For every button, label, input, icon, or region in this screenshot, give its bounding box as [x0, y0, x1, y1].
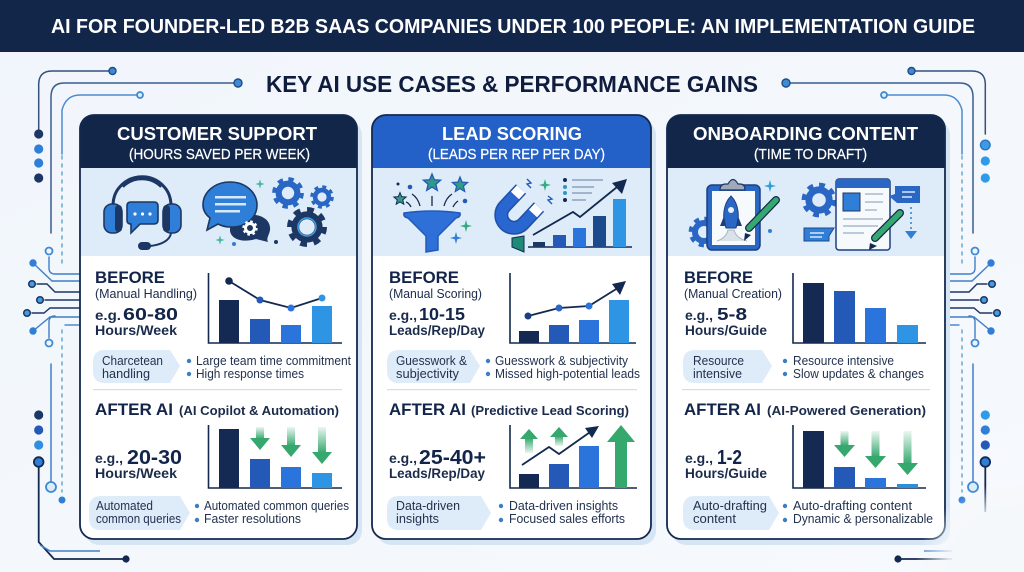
chart: before lead scoring [510, 273, 636, 343]
header: lead scoring [372, 115, 651, 168]
text: before lead scoring: 10-15 [419, 304, 465, 324]
title banner: AI FOR FOUNDER-LED B2B SAAS COMPANIES UNDER 100 PEOPLE: AN IMPLEMENTATION GUIDE [51, 16, 975, 38]
text: after onboarding: Hours/Guide [685, 465, 767, 481]
text: after lead scoring: e.g., [389, 450, 417, 466]
callout: after lead scoring: insights [396, 512, 439, 526]
icon: chat bubbles and gears [203, 179, 332, 246]
header: onboarding content [667, 115, 945, 168]
chart: after customer support [208, 425, 342, 488]
callout: after lead scoring: Data-driven insights [509, 499, 618, 513]
callout: after lead scoring [387, 496, 625, 530]
circuit decoration left [24, 68, 242, 563]
header: onboarding content: ONBOARDING CONTENT [693, 123, 919, 144]
callout: after onboarding: Auto-drafting [693, 499, 767, 513]
callout: before customer support: Large team time commitment [196, 354, 352, 368]
text: before lead scoring [389, 268, 485, 338]
callout: before customer support: High response times [196, 367, 304, 381]
header: customer support [80, 115, 357, 168]
callout: after customer support: common queries [96, 512, 181, 526]
callout: before onboarding: Slow updates & changes [793, 367, 924, 381]
chart: before customer support [208, 273, 342, 343]
text: before customer support: e.g. [95, 308, 121, 323]
callout: after customer support [89, 496, 349, 530]
text: after customer support [95, 400, 339, 481]
text: before lead scoring: (Manual Scoring) [389, 287, 482, 301]
callout: before lead scoring: Guesswork & [396, 354, 468, 368]
text: after lead scoring: (Predictive Lead Scoring) [471, 403, 629, 418]
callout: before lead scoring: Missed high-potential leads [495, 367, 640, 381]
text: before customer support: (Manual Handling) [95, 287, 197, 301]
text: before lead scoring: BEFORE [389, 268, 459, 287]
callout: after onboarding [683, 496, 933, 530]
text: after lead scoring [389, 400, 629, 481]
header: customer support: CUSTOMER SUPPORT [117, 123, 318, 144]
text: after onboarding: 1-2 [717, 447, 742, 469]
text: before customer support [95, 268, 197, 338]
text: after customer support: AFTER AI [95, 400, 173, 419]
callout: after onboarding: Dynamic & personalizable [793, 512, 933, 526]
header: customer support: (HOURS SAVED PER WEEK) [129, 146, 310, 163]
text: after lead scoring: AFTER AI [389, 400, 466, 419]
text: after onboarding: (AI-Powered Generation) [767, 403, 926, 418]
text: before onboarding: BEFORE [684, 268, 753, 287]
text: after onboarding: AFTER AI [684, 400, 761, 419]
text: before onboarding [684, 268, 782, 338]
text: before onboarding: e.g., [685, 308, 713, 323]
icon: magnet and growth chart [501, 178, 632, 252]
callout: after lead scoring: Focused sales efforts [509, 512, 625, 526]
panel: onboarding content [667, 115, 950, 545]
callout: after customer support: Automated common queries [204, 499, 349, 513]
callout: before lead scoring: Guesswork & subjectivity [495, 354, 629, 368]
text: before customer support: BEFORE [95, 268, 165, 287]
text: after lead scoring: 25-40+ [419, 447, 486, 469]
chart: after lead scoring [510, 425, 637, 488]
panel: lead scoring [372, 115, 656, 545]
text: after onboarding [684, 400, 926, 481]
text: after customer support: (AI Copilot & Automation) [179, 403, 339, 418]
callout: before onboarding: intensive [693, 367, 742, 381]
text: before onboarding: (Manual Creation) [684, 287, 782, 301]
section heading: KEY AI USE CASES & PERFORMANCE GAINS [266, 71, 758, 97]
icon: document with gear and pencil [804, 179, 920, 250]
panel: customer support [80, 115, 362, 545]
callout: before lead scoring: subjectivity [396, 367, 460, 381]
callout: before customer support: handling [102, 367, 150, 381]
header: lead scoring: LEAD SCORING [442, 123, 582, 144]
callout: after onboarding: Auto-drafting content [793, 499, 913, 513]
header: onboarding content: (TIME TO DRAFT) [754, 146, 867, 163]
circuit decoration right [782, 68, 1000, 563]
callout: after onboarding: content [693, 512, 737, 526]
callout: before customer support: Charcetean [102, 354, 163, 368]
text: before onboarding: Hours/Guide [685, 323, 767, 338]
text: after customer support: Hours/Week [95, 465, 177, 481]
chart: before onboarding [793, 273, 926, 343]
callout: before customer support [93, 350, 352, 383]
text: after lead scoring: Leads/Rep/Day [389, 465, 485, 481]
callout: before onboarding [683, 350, 924, 383]
callout: after customer support: Automated [96, 499, 153, 513]
header: lead scoring: (LEADS PER REP PER DAY) [428, 146, 605, 163]
callout: before onboarding: Resource [693, 354, 744, 368]
callout: after lead scoring: Data-driven [396, 499, 460, 513]
text: before customer support: Hours/Week [95, 323, 178, 338]
icon: clipboard with rocket [691, 180, 776, 250]
text: after onboarding: e.g., [685, 450, 713, 466]
title banner [0, 0, 1024, 52]
text: before onboarding: 5-8 [717, 304, 747, 324]
callout: before onboarding: Resource intensive [793, 354, 894, 368]
text: after customer support: e.g., [95, 450, 123, 466]
chart: after onboarding [793, 425, 926, 488]
callout: before lead scoring [387, 350, 640, 383]
callout: after customer support: Faster resolutions [204, 512, 301, 526]
text: after customer support: 20-30 [127, 447, 182, 469]
text: before customer support: 60-80 [123, 304, 178, 324]
icon: funnel with stars [394, 174, 472, 252]
text: before lead scoring: Leads/Rep/Day [389, 323, 485, 338]
icon: headset with chat [104, 178, 181, 250]
text: before lead scoring: e.g., [389, 308, 417, 323]
